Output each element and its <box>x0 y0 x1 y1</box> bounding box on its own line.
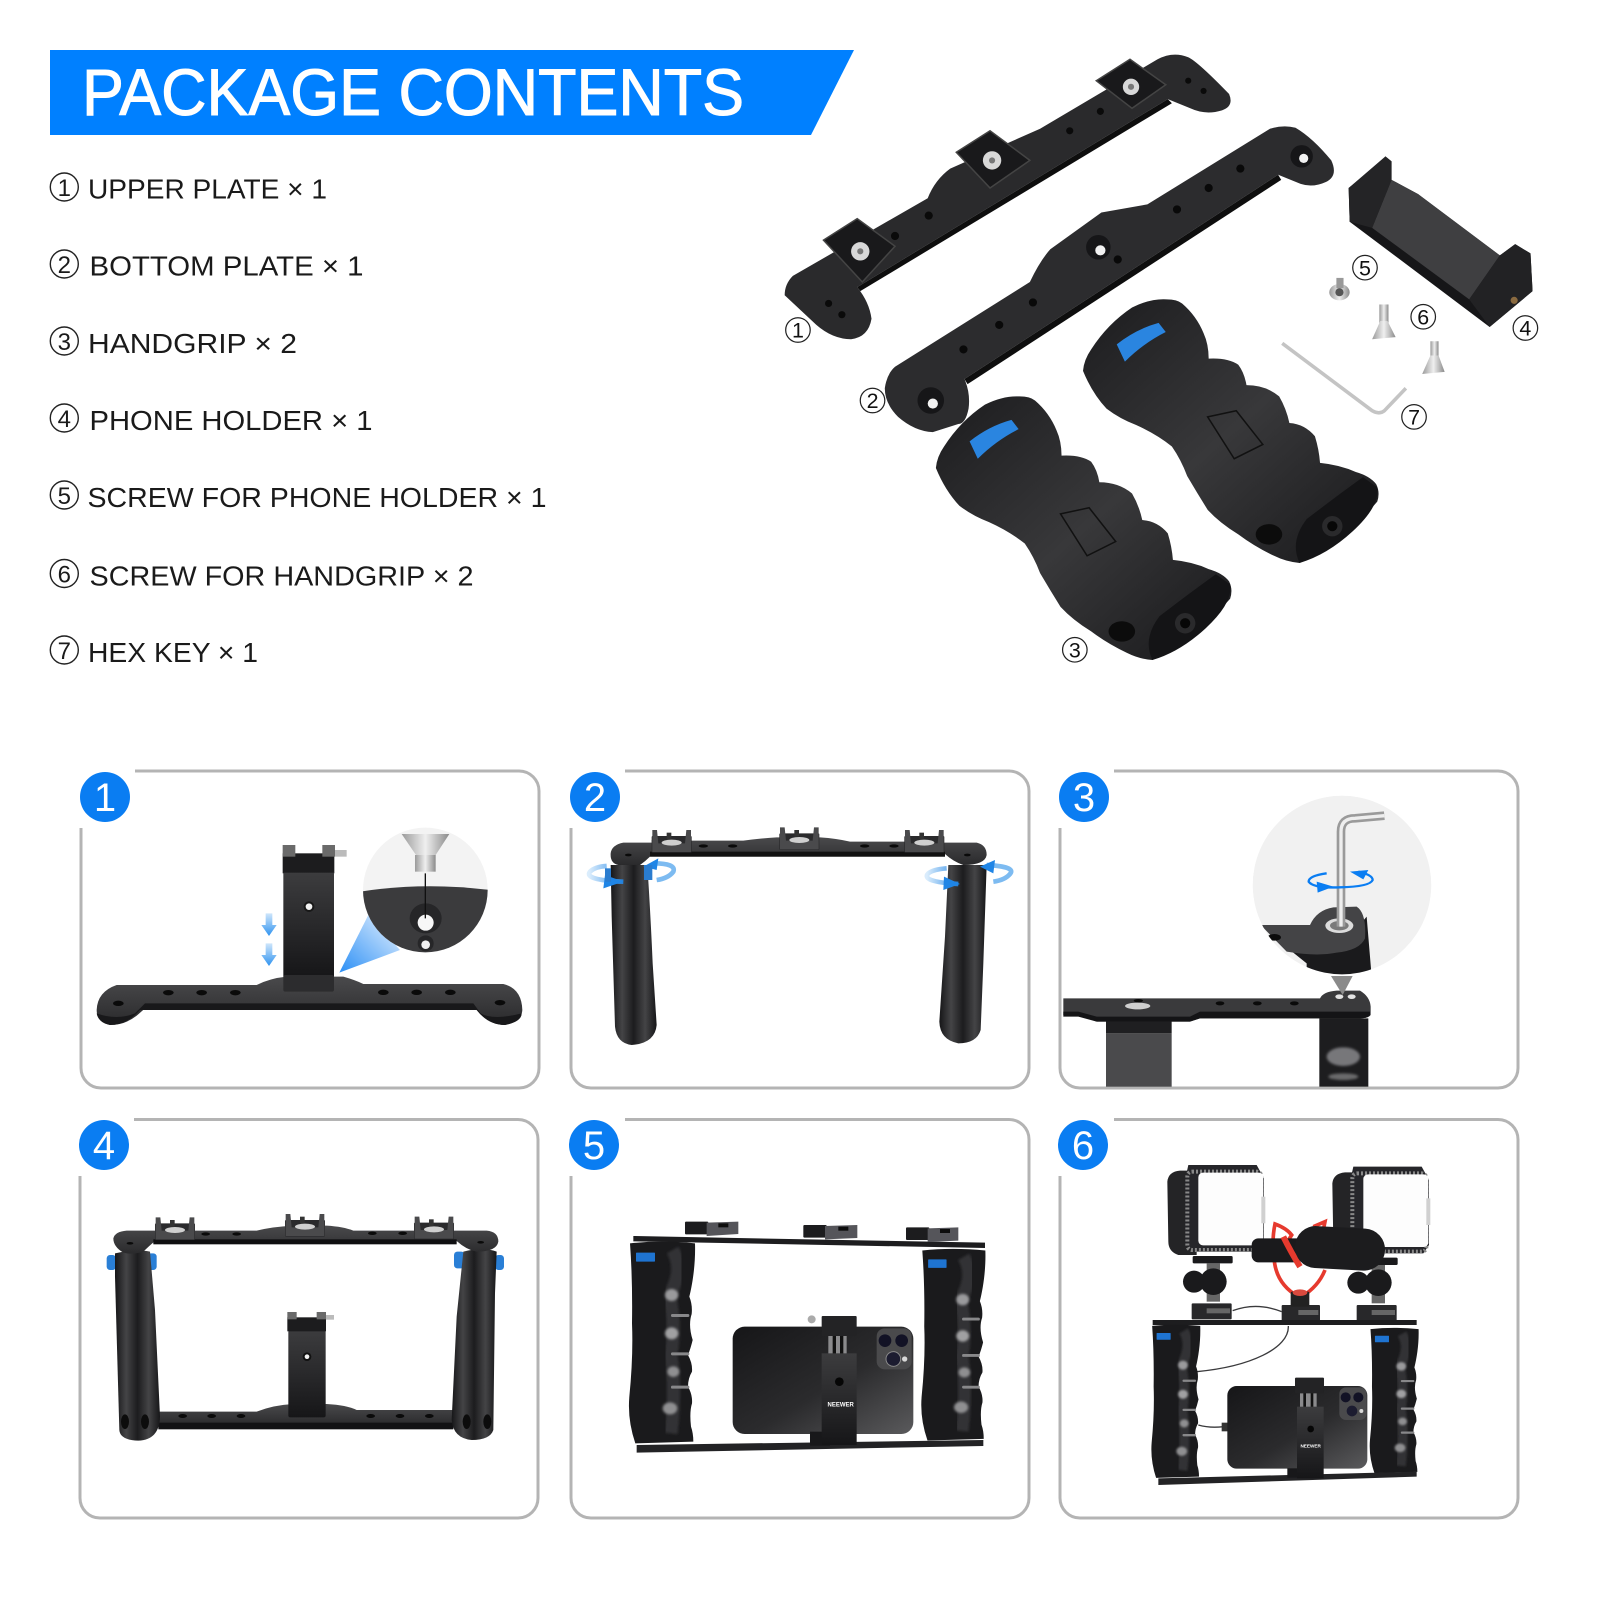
item 4: phone holder: 4 <box>58 406 71 433</box>
ball head mounts <box>1183 1256 1398 1303</box>
step 1 badge: 1 <box>94 776 116 820</box>
label 2 <box>860 388 885 413</box>
grip base details <box>121 1414 491 1429</box>
handgrips <box>611 865 657 1045</box>
phone holder <box>287 1312 334 1417</box>
left handgrip <box>629 1242 695 1443</box>
item 3: handgrip: HANDGRIP × 2 <box>88 328 297 359</box>
title banner: PACKAGE CONTENTS <box>82 55 744 129</box>
part: bottom plate <box>885 126 1334 432</box>
phone holder <box>1287 1378 1324 1478</box>
zoom circle <box>360 827 493 957</box>
part: hex key <box>1282 343 1406 413</box>
top plate <box>113 1226 498 1254</box>
item 1: upper plate: 1 <box>58 175 71 202</box>
label 7 <box>1402 405 1426 430</box>
label 4: 4 <box>1519 317 1531 341</box>
callout beam <box>339 915 400 973</box>
item 7: hex key: 7 <box>58 638 71 665</box>
cables <box>1197 1306 1288 1427</box>
phone <box>1227 1386 1367 1469</box>
top plate <box>633 1236 985 1248</box>
step 5 illustration <box>629 1222 985 1453</box>
label 5: 5 <box>1359 256 1371 280</box>
phone holder: NEEWER <box>1300 1443 1322 1448</box>
item 6: screw for handgrip: 6 <box>58 562 71 588</box>
label 6 <box>1411 304 1435 329</box>
step 5 badge <box>569 1120 619 1170</box>
step 6 frame <box>1060 1120 1518 1518</box>
step 1 badge <box>80 772 130 822</box>
label 3: 3 <box>1069 638 1081 662</box>
hot shoes <box>685 1222 958 1242</box>
right LED light <box>1332 1167 1430 1257</box>
step 2 illustration <box>589 827 1011 1045</box>
top plate <box>1153 1320 1417 1325</box>
panel: step 5 <box>569 1120 1029 1518</box>
step 2 frame <box>571 771 1029 1088</box>
step 1 illustration <box>97 827 522 1025</box>
item 2: bottom plate: 2 <box>58 252 71 279</box>
grip below plate <box>1319 1018 1368 1087</box>
hot shoes <box>652 830 692 853</box>
item 6: screw for handgrip: SCREW FOR HANDGRIP × 2 <box>90 560 474 592</box>
holder below plate <box>1106 1033 1172 1087</box>
item 2: bottom plate: BOTTOM PLATE × 1 <box>90 250 363 282</box>
part: handgrip upper <box>1083 299 1379 563</box>
item 5: screw for phone holder: 5 <box>58 483 71 510</box>
bottom plate <box>637 1440 983 1453</box>
hot shoes with accessories <box>1192 1303 1397 1321</box>
item 4: phone holder: PHONE HOLDER × 1 <box>90 405 372 436</box>
blue wheels <box>107 1252 504 1270</box>
plate segment <box>1063 991 1371 1022</box>
step 5 badge: 5 <box>583 1124 605 1168</box>
right handgrip <box>921 1249 985 1440</box>
step 3 badge: 3 <box>1073 776 1095 820</box>
step 6 illustration <box>1151 1165 1430 1485</box>
item 5: screw for phone holder: SCREW FOR PHONE HOLDER × 1 <box>88 482 546 513</box>
step 6 badge: 6 <box>1072 1124 1094 1168</box>
phone holder: NEEWER <box>828 1402 854 1408</box>
item 3: handgrip: 3 <box>58 329 71 356</box>
upper plate <box>611 837 987 865</box>
part: upper plate <box>785 55 1231 339</box>
step 2 badge <box>570 772 620 822</box>
bottom plate <box>158 1404 453 1425</box>
step 4 frame <box>80 1120 538 1518</box>
zoom circle <box>1253 796 1431 977</box>
label 4 <box>1513 316 1538 341</box>
label 1 <box>786 318 810 343</box>
parts photo group <box>785 55 1538 662</box>
phone <box>733 1327 913 1434</box>
package contents list <box>50 173 547 668</box>
blue down arrows <box>261 913 277 966</box>
step 3 badge <box>1059 772 1109 822</box>
right handgrip <box>452 1249 497 1440</box>
label 3 <box>1063 638 1087 662</box>
part: phone holder <box>1349 156 1533 327</box>
label 7: 7 <box>1408 406 1420 430</box>
rotation arrows <box>589 863 1011 884</box>
left handgrip <box>1151 1325 1200 1478</box>
part: handgrip lower <box>936 396 1231 660</box>
panel: step 3 <box>1059 771 1518 1088</box>
item 1: upper plate: UPPER PLATE × 1 <box>88 174 327 204</box>
panel: step 4 <box>79 1120 538 1518</box>
step 1 frame <box>81 771 539 1088</box>
step 3 illustration <box>1063 796 1431 1087</box>
step 6 badge <box>1058 1120 1108 1170</box>
phone holder <box>283 845 347 992</box>
part number labels <box>786 255 1538 662</box>
step 3 frame <box>1060 771 1518 1088</box>
step 4 badge <box>79 1120 129 1170</box>
bottom plate <box>1158 1472 1417 1485</box>
phone holder <box>808 1315 857 1446</box>
label 2: 2 <box>867 389 879 413</box>
part: screw for phone holder <box>1329 278 1350 300</box>
lower plate <box>97 977 522 1025</box>
step 4 badge: 4 <box>93 1124 115 1168</box>
panel: step 1 <box>80 771 539 1088</box>
microphone <box>1252 1222 1386 1307</box>
zoom pointer <box>1331 976 1353 995</box>
hot shoes <box>155 1217 195 1240</box>
item 7: hex key: HEX KEY × 1 <box>88 637 258 668</box>
right handgrip <box>1370 1328 1419 1473</box>
label 6: 6 <box>1417 305 1429 329</box>
step 2 badge: 2 <box>584 776 606 820</box>
step 4 illustration <box>107 1214 504 1441</box>
label 1: 1 <box>792 319 804 343</box>
step 5 frame <box>571 1120 1029 1518</box>
panel: step 6 <box>1058 1120 1518 1518</box>
left handgrip <box>115 1250 160 1441</box>
panel: step 2 <box>570 771 1029 1088</box>
label 5 <box>1353 255 1377 280</box>
left LED light <box>1167 1165 1265 1255</box>
part: screws for handgrip <box>1372 304 1445 374</box>
